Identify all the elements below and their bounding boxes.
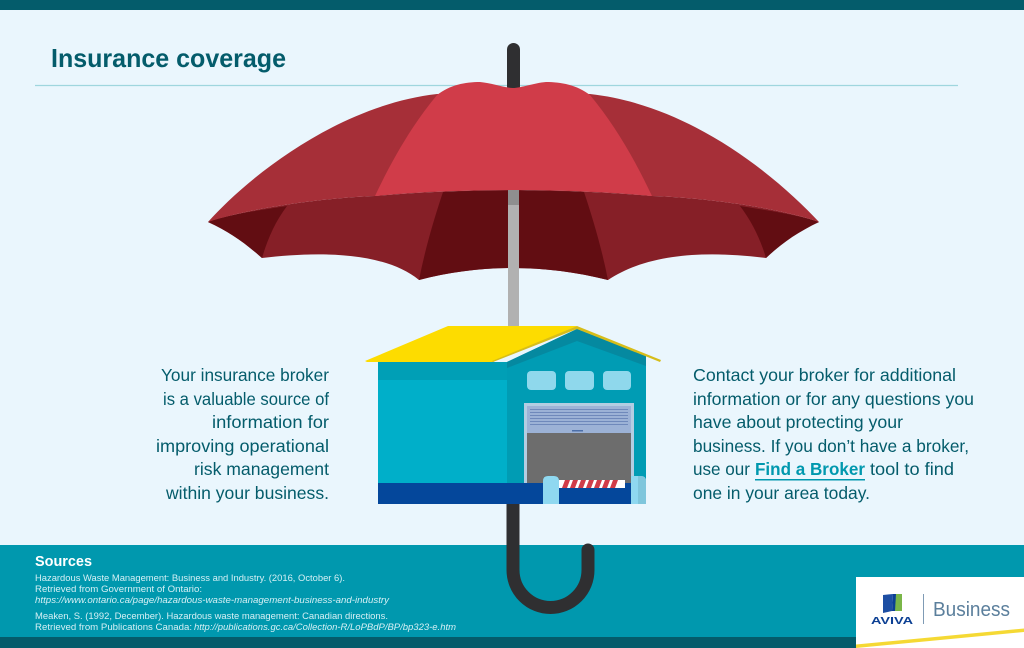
umbrella xyxy=(208,43,819,608)
right text block: have about protecting your xyxy=(693,412,903,432)
icon: umbrella tip xyxy=(507,43,520,93)
sources text: Meaken, S. (1992, December). Hazardous waste management: Canadian directions. xyxy=(35,611,388,621)
title: Insurance coverage xyxy=(51,43,286,73)
right text block: use our xyxy=(693,459,750,479)
left text block: within your business. xyxy=(165,483,329,503)
sources text: Hazardous Waste Management: Business and Industry. (2016, October 6). xyxy=(35,573,345,583)
icon: umbrella handle xyxy=(513,500,588,608)
warehouse xyxy=(365,326,661,504)
warehouse side wall xyxy=(378,362,508,484)
roof xyxy=(365,326,661,362)
link: Find a Broker: Find a Broker xyxy=(755,459,865,479)
bollards xyxy=(543,476,646,504)
footer band xyxy=(0,545,1024,648)
yellow swoosh xyxy=(856,628,1024,648)
canopy underside xyxy=(208,190,819,330)
left text block: Your insurance broker xyxy=(161,365,329,385)
base xyxy=(378,483,646,504)
left text block: information for xyxy=(212,412,329,432)
loading door xyxy=(524,403,634,484)
windows xyxy=(527,371,631,390)
right text block: one in your area today. xyxy=(693,483,870,503)
umbrella shaft xyxy=(508,190,519,330)
barrier xyxy=(559,480,625,488)
sources text: https://www.ontario.ca/page/hazardous-waste-management-business-and-industry xyxy=(35,595,390,605)
sources text: Retrieved from Government of Ontario: xyxy=(35,584,202,594)
left text block: improving operational xyxy=(156,436,329,456)
canopy outer panels xyxy=(208,94,819,222)
logo panel xyxy=(856,577,1024,648)
sources heading: Sources xyxy=(35,554,92,570)
sources text: Retrieved from Publications Canada: xyxy=(35,622,192,632)
right text block: Contact your broker for additional xyxy=(693,365,956,385)
Business wordmark: Business xyxy=(933,599,1010,621)
Aviva wordmark: AVIVA xyxy=(871,616,913,627)
right text block: information or for any questions you xyxy=(693,389,974,409)
left text block xyxy=(156,365,329,503)
sources text: http://publications.gc.ca/Collection-R/LoPBdP/BP/bp323-e.htm xyxy=(194,622,457,632)
sources text xyxy=(35,573,457,632)
right text block: business. If you don’t have a broker, xyxy=(693,436,969,456)
warehouse front wall xyxy=(507,329,646,484)
left text block: risk management xyxy=(194,459,329,479)
right text block xyxy=(693,365,974,503)
canopy centre panel xyxy=(375,82,652,196)
left text block: is a valuable source of xyxy=(163,389,329,409)
icon: Aviva flag xyxy=(883,594,902,613)
right text block: tool to find xyxy=(870,459,954,479)
